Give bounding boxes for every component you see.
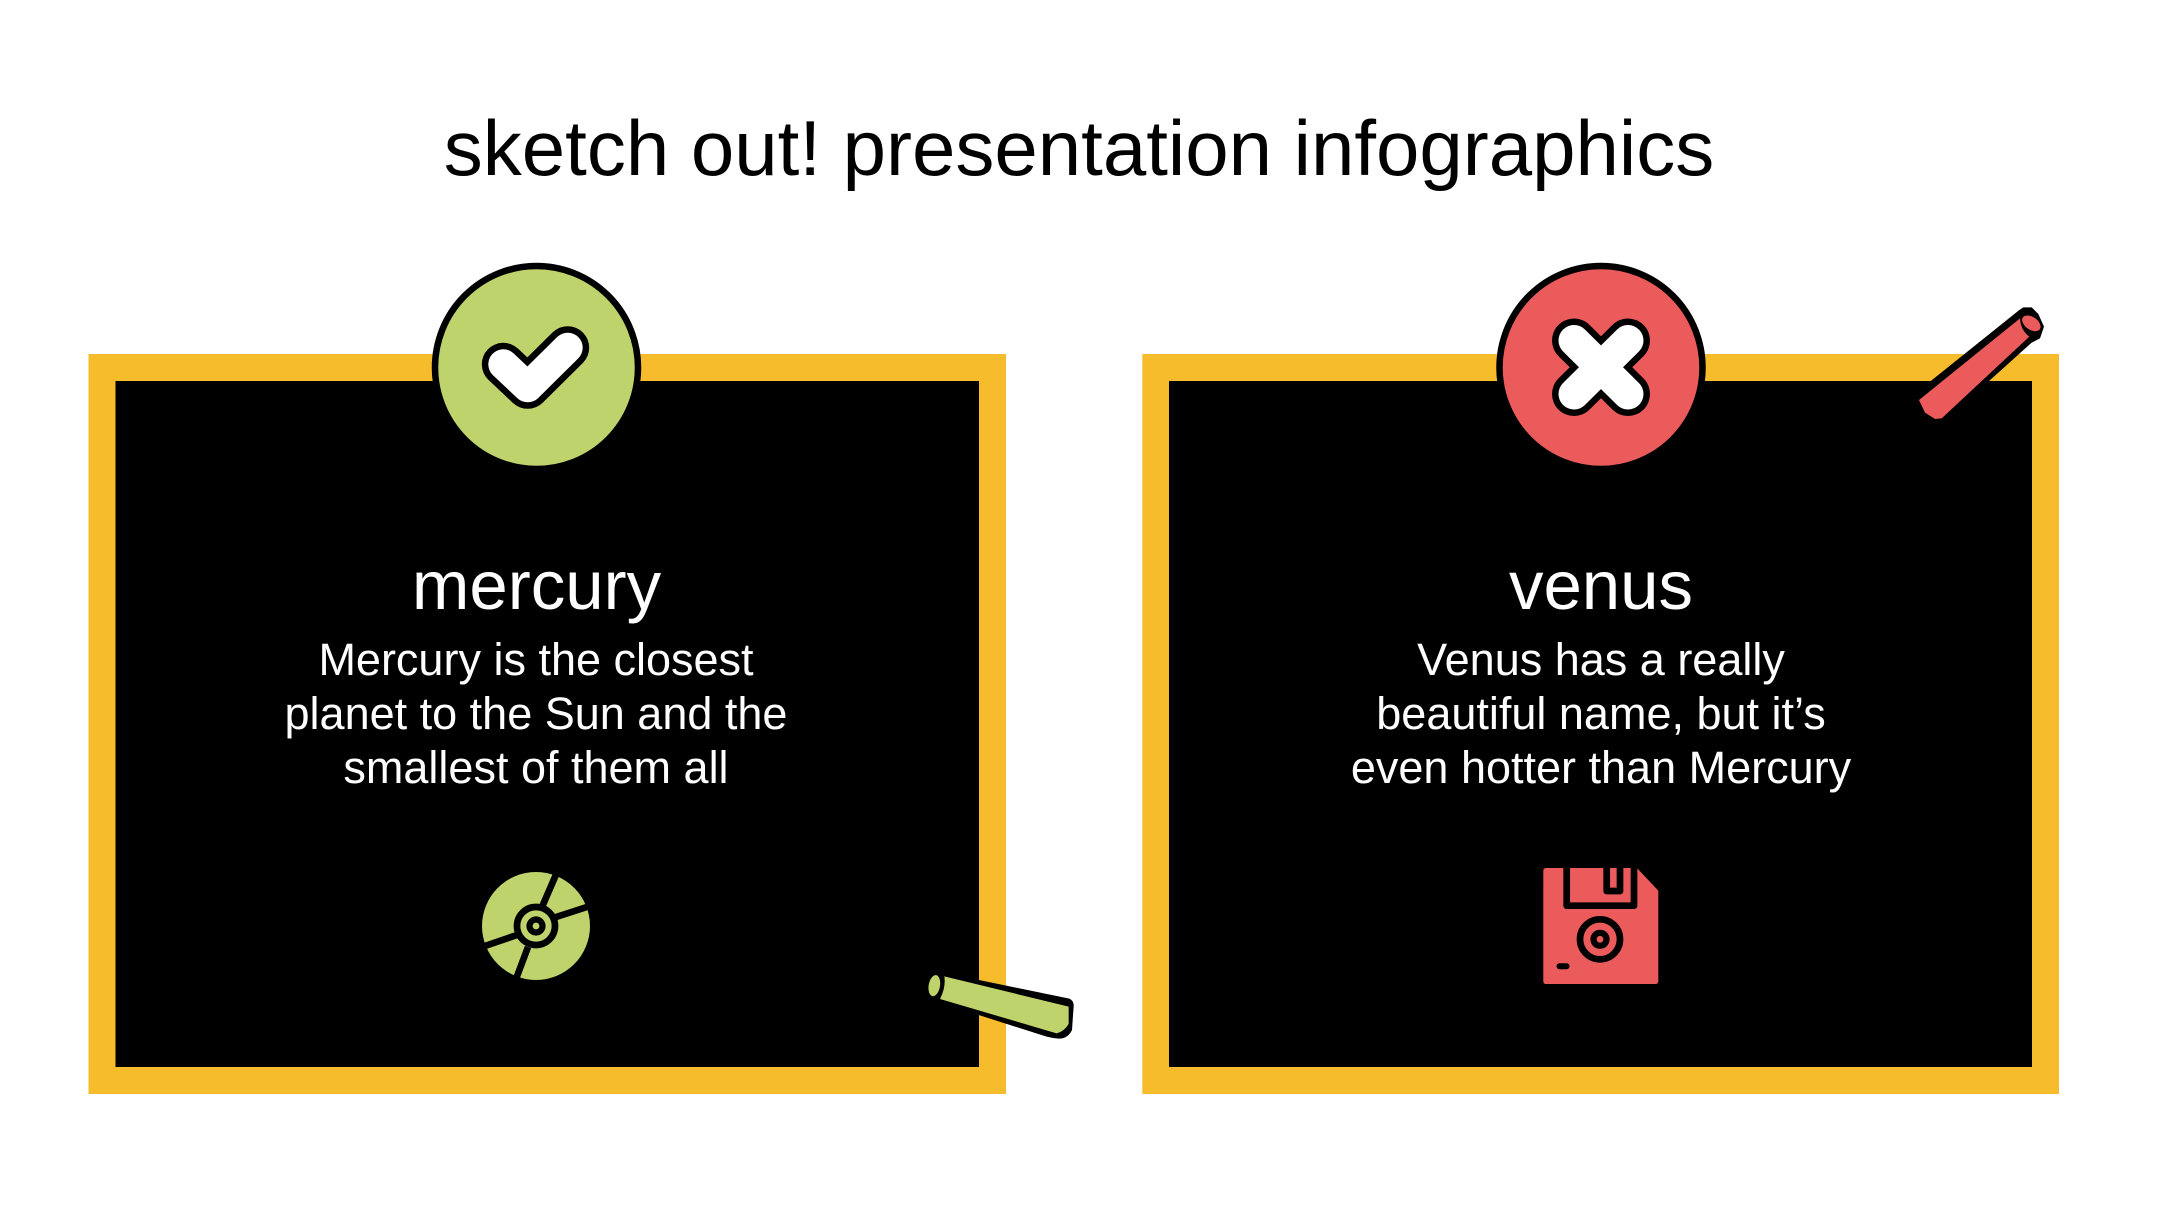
mercury chalkboard frame <box>88 354 1006 1094</box>
icon: compact disc <box>482 870 590 980</box>
icon: green chalk <box>927 973 1074 1039</box>
panel: venus <box>1142 266 2059 1094</box>
heading: venus: venus <box>1509 547 1693 624</box>
mercury chalkboard surface <box>116 381 979 1067</box>
text: venus description <box>1351 634 1852 793</box>
icon: check badge <box>435 266 638 469</box>
icon: floppy disk <box>1543 863 1658 984</box>
text: mercury description: smallest of them all <box>343 742 729 793</box>
text: venus description: even hotter than Mercury <box>1351 742 1852 793</box>
icon: cross badge <box>1500 266 1702 469</box>
icon: red chalk <box>1917 307 2044 422</box>
venus chalkboard frame <box>1142 354 2059 1094</box>
panel: mercury <box>88 266 1074 1094</box>
venus chalkboard surface <box>1169 381 2032 1067</box>
text: mercury description: planet to the Sun and the <box>285 688 787 739</box>
heading: mercury: mercury <box>412 547 662 624</box>
text: venus description: Venus has a really <box>1417 634 1785 685</box>
text: venus description: beautiful name, but it’s <box>1376 688 1826 739</box>
text: mercury description: Mercury is the closest <box>318 634 754 685</box>
text: mercury description <box>285 634 787 793</box>
title: sketch out! presentation infographics <box>444 104 1714 192</box>
